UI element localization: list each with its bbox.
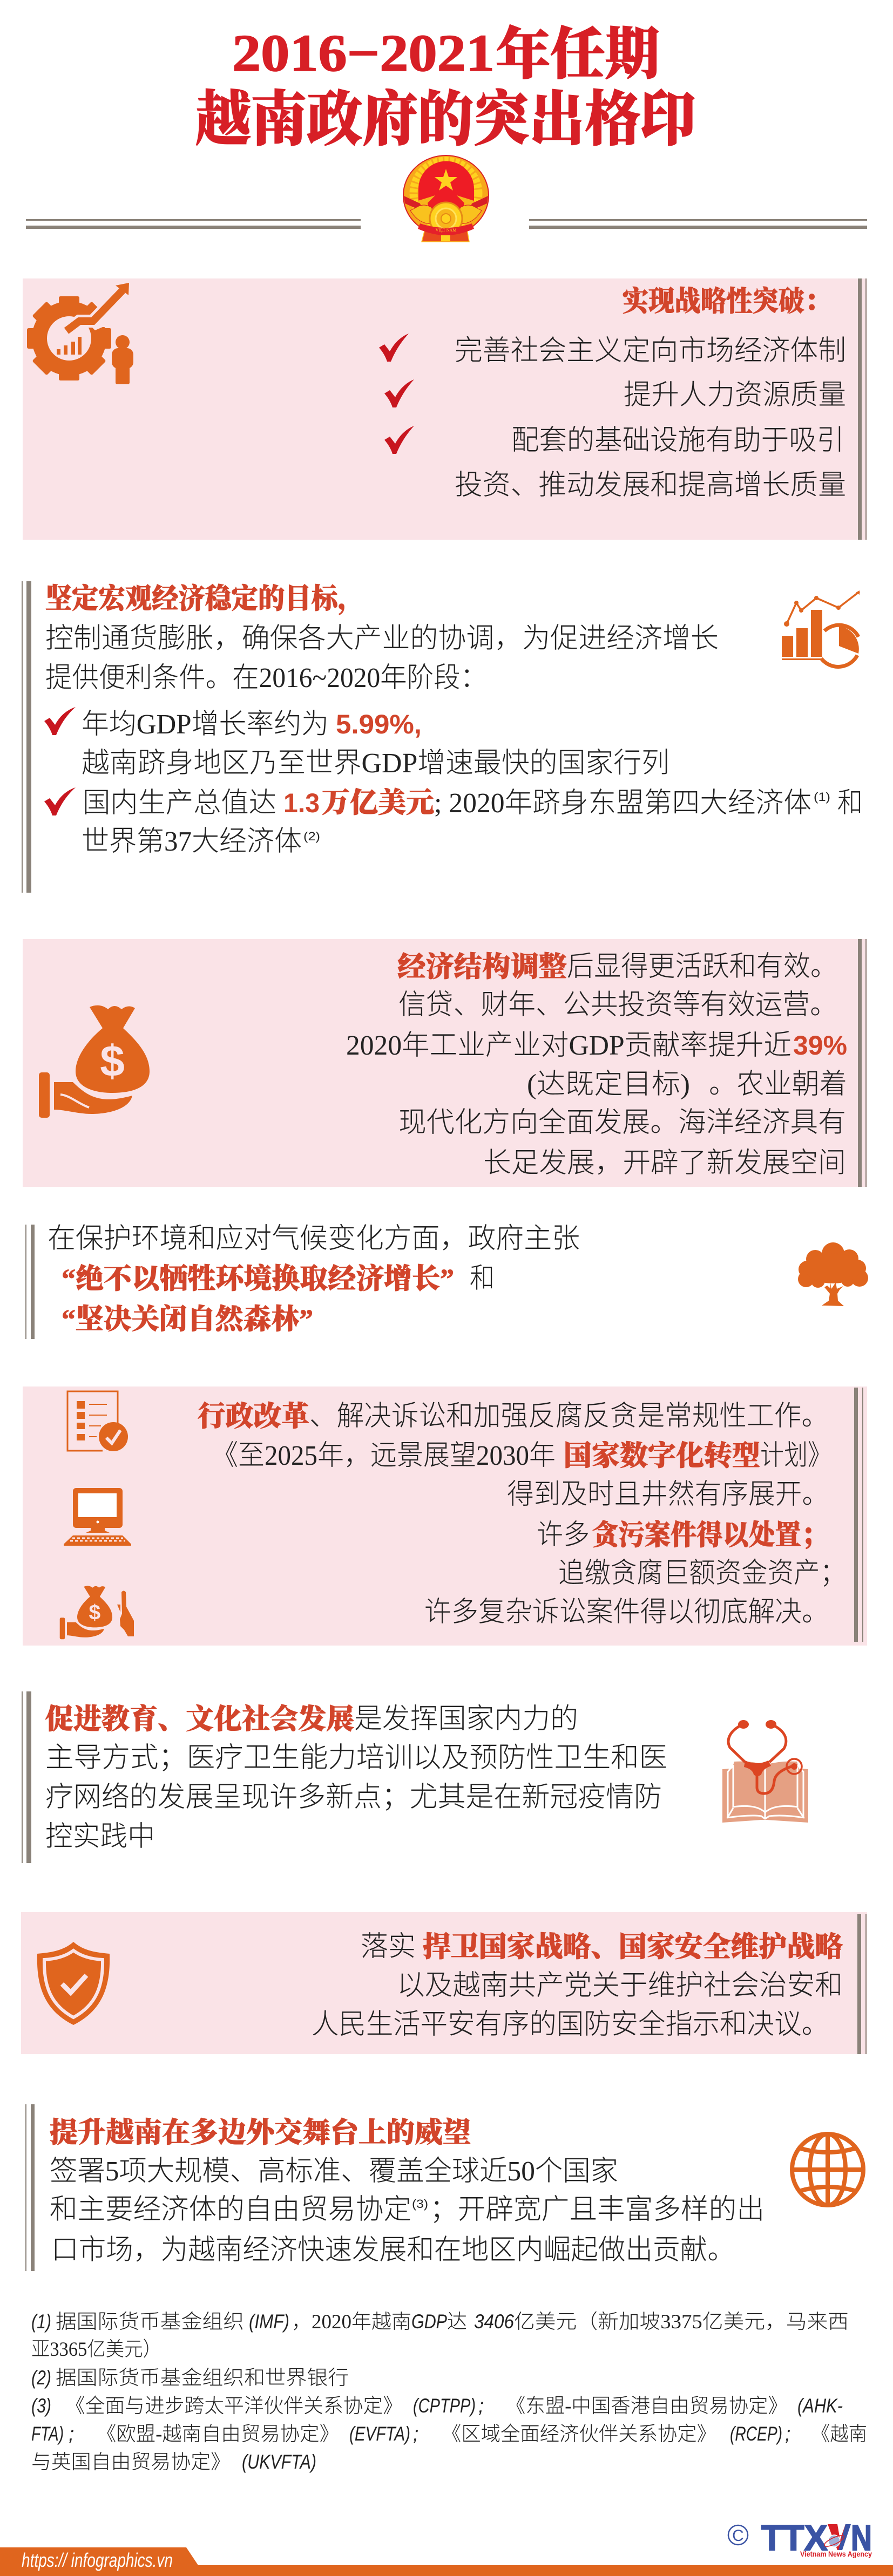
text: restructuring: 后显得更活跃和有效。 [567,951,837,982]
text: diplomacy: (3) [412,2197,428,2211]
title: 越南政府的突出格印 [195,87,696,153]
text: GDP value [82,787,863,857]
text: GDP value: ; 2020年跻身东盟第四大经济体 [434,788,811,819]
icon: shield [37,1942,110,2025]
text: environment: “绝不以牺牲环境换取经济增长” [62,1263,454,1295]
text: GDP value: 国内生产总值达 [83,788,276,819]
logo: TTXVN: Vietnam News Agency [800,2550,872,2558]
text: diplomacy [50,2156,765,2266]
text: education: 控实践中 [45,1821,155,1852]
footnotes: (CPTPP) [413,2395,476,2417]
text: GDP value: 1.3 [283,788,320,818]
logo: TTXVN: C [732,2527,744,2545]
text: breakthrough list: 配套的基础设施有助于吸引 [511,425,844,456]
text: education: 疗网络的发展呈现许多新点；尤其是在新冠疫情防 [45,1782,662,1813]
text: environment: 在保护环境和应对气候变化方面，政府主张 [48,1224,580,1254]
text: GDP growth [82,709,669,779]
footnotes: 亚3365亿美元） [31,2339,161,2361]
icon: gear with rising arrow and person [27,283,133,384]
logo: TTXVN: N [851,2518,872,2558]
text: GDP value: 万亿美元 [322,787,434,819]
text: restructuring: 长足发展，开辟了新发展空间 [483,1148,846,1179]
text: education: 主导方式；医疗卫生能力培训以及预防性卫生和医 [45,1743,667,1773]
footer bar with url: https:// infographics.vn [22,2549,173,2571]
footnotes: 《越南 [811,2423,867,2445]
footer bar with url [0,2547,893,2576]
text: GDP value: (2) [303,830,320,843]
text: diplomacy: 签署5项大规模、高标准、覆盖全球近50个国家 [50,2156,618,2187]
footnotes: (1) [31,2310,51,2333]
footnotes: 亿美元（新加坡3375亿美元，马来西 [514,2311,849,2333]
text: restructuring: 。农业朝着 [709,1069,847,1100]
text: defence: 落实 [361,1932,416,1962]
footnotes: 与英国自由贸易协定》 [31,2451,231,2473]
text: reform: 追缴贪腐巨额资金资产； [558,1558,846,1589]
panel: administrative reform [23,1386,867,1646]
footnotes: (IMF) [249,2310,289,2333]
icon: money bag in hand [39,1005,150,1118]
text: diplomacy: 口市场，为越南经济快速发展和在地区内崛起做出贡献。 [51,2235,735,2266]
footnotes: (3) [31,2395,51,2417]
footnotes: FTA) [31,2423,64,2445]
panel: strategic breakthroughs [23,278,867,540]
panel: macroeconomic stability [22,581,863,893]
text: restructuring: 信贷、财年、公共投资等有效运营。 [398,990,837,1021]
text: GDP growth: 5.99%, [336,709,422,739]
text: environment: 和 [470,1263,495,1294]
text: reform: 行政改革 [198,1401,309,1432]
footnotes: ; [785,2423,790,2445]
text: restructuring: 2020年工业产业对GDP贡献率提升近 [346,1030,791,1061]
icon: checklist [67,1391,128,1451]
footnotes: (AHK- [797,2395,843,2417]
footnotes: (2) [31,2367,51,2389]
footnotes [31,2310,867,2473]
title: 2016−2021 [232,24,495,82]
text: environment [48,1224,580,1335]
footnotes: (UKVFTA) [242,2451,316,2473]
text: breakthrough list: 提升人力资源质量 [624,380,846,411]
footnotes: 3406 [474,2310,514,2333]
footnotes: 《欧盟-越南自由贸易协定》 [97,2423,339,2445]
logo: TTXVN [728,2518,872,2558]
text: intro: 提供便利条件。在2016~2020年阶段： [45,663,487,694]
icon: national emblem of Vietnam: VIỆT NAM [436,227,456,233]
text: GDP growth: 年均GDP增长率约为 [82,709,329,740]
text: intro: 控制通货膨胀，确保各大产业的协调，为促进经济增长 [45,623,719,654]
footnotes: 达 [447,2311,467,2333]
text: diplomacy: ；开辟宽广且丰富多样的出 [430,2194,765,2225]
text: reform: 许多复杂诉讼案件得以彻底解决。 [424,1597,829,1628]
text: reform [198,1401,846,1628]
icon: money bag and refusing hand: $ [89,1601,100,1625]
text: environment: “坚决关闭自然森林” [62,1304,313,1335]
icon: check mark 3 [384,426,414,454]
text: reform: 计划》 [760,1440,831,1471]
text: GDP value: 和 [837,788,863,819]
panel: environment [25,1224,868,1339]
heading: diplomacy: 提升越南在多边外交舞台上的威望 [50,2117,471,2149]
heading: strategic breakthroughs: 实现战略性突破： [623,286,830,317]
icon: money bag in hand: $ [100,1037,125,1086]
logo: TTXVN: TTX [761,2518,828,2558]
icon: globe [792,2134,863,2205]
text: defence: 捍卫国家战略、国家安全维护战略 [423,1931,843,1963]
text: GDP value: 世界第37大经济体 [82,826,302,857]
text: reform: 《至2025年，远景展望2030年 [212,1440,556,1471]
footnotes: 据国际货币基金组织 [56,2310,244,2333]
footnotes: (EVFTA) [349,2423,410,2445]
icon: stethoscope on book [722,1720,808,1823]
text: restructuring: (达既定目标) [527,1069,690,1100]
text: breakthrough list: 完善社会主义定向市场经济体制 [455,336,846,366]
icon: money bag and refusing hand [60,1586,134,1639]
icon: national emblem of Vietnam [403,155,489,242]
text: GDP value: (1) [814,790,830,804]
footnotes: 《东盟-中国香港自由贸易协定》 [506,2395,788,2417]
footnotes: ; [478,2395,484,2417]
text: restructuring: 39% [793,1030,847,1061]
text: restructuring: 现代化方向全面发展。海洋经济具有 [398,1107,846,1138]
icon: computer [64,1488,131,1546]
panel: education, culture and health [22,1691,808,1863]
text: reform: 许多 [537,1520,590,1551]
text: education: 促进教育、文化社会发展 [45,1704,354,1735]
icon: charts [782,590,860,667]
icon: tree [798,1242,868,1306]
text: defence: 人民生活平安有序的国防安全指示和决议。 [312,2009,829,2040]
text: reform: 得到及时且井然有序展开。 [507,1479,829,1510]
text: GDP growth: 越南跻身地区乃至世界GDP增速最快的国家行列 [82,748,669,779]
icon: check mark [44,707,76,735]
footnotes: ; [413,2423,418,2445]
panel: diplomacy [25,2104,863,2271]
text: diplomacy: 和主要经济体的自由贸易协定 [50,2194,411,2225]
heading: macroeconomic stability: 坚定宏观经济稳定的目标， [45,583,364,615]
text: restructuring [346,951,847,1179]
footnotes: ，2020年越南 [292,2311,411,2333]
text: defence: 以及越南共产党关于维护社会治安和 [397,1970,843,2001]
footnotes: GDP [411,2310,447,2333]
footnotes: (RCEP) [730,2423,782,2445]
text: restructuring: 经济结构调整 [397,951,567,983]
title: 年任期 [496,24,660,86]
footnotes: 据国际货币基金组织和世界银行 [56,2367,349,2389]
panel: economic restructuring [23,939,867,1187]
text: reform: 、解决诉讼和加强反腐反贪是常规性工作。 [309,1401,829,1432]
text: education: 是发挥国家内力的 [354,1704,578,1735]
text: education [45,1704,667,1852]
icon: check mark 1 [379,334,409,362]
footnotes: 《全面与进步跨太平洋伙伴关系协定》 [65,2395,403,2417]
panel: national defence [21,1912,867,2054]
text: intro [45,623,719,694]
text: reform: 国家数字化转型 [564,1440,760,1472]
text: breakthrough list: 投资、推动发展和提高增长质量 [455,470,846,501]
footnotes: 《区域全面经济伙伴关系协定》 [442,2423,716,2445]
icon: check mark [44,787,76,815]
title [195,24,696,153]
footnotes: ; [69,2423,74,2445]
text: breakthrough list [455,336,846,501]
text: defence [312,1931,843,2040]
text: reform: 贪污案件得以处置； [592,1519,827,1551]
icon: check mark 2 [384,379,414,407]
